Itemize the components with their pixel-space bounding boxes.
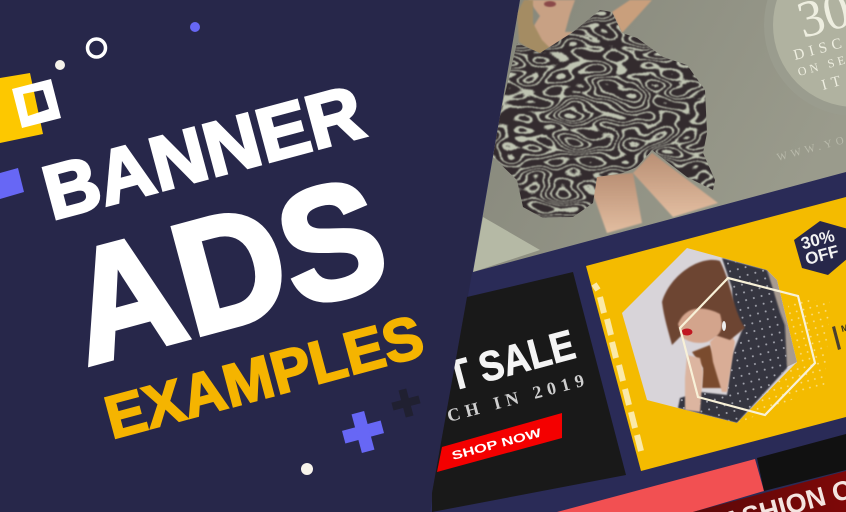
heading: banner: BANNER xyxy=(34,70,372,236)
panel: fashion photo banner xyxy=(470,0,846,275)
lips xyxy=(544,1,556,7)
icon: white ring xyxy=(88,39,106,57)
hair xyxy=(662,260,745,345)
zebra dress xyxy=(493,10,715,218)
panel: tilted banner mockups backdrop xyxy=(430,0,846,512)
badge percent: 30% xyxy=(799,226,837,253)
black block xyxy=(757,434,846,491)
right leg xyxy=(633,153,718,217)
earring xyxy=(722,321,726,331)
model xyxy=(485,0,725,233)
button label: SHOP NOW xyxy=(450,425,544,463)
badge shape xyxy=(794,221,846,275)
portrait backdrop xyxy=(622,248,797,423)
icon: purple square xyxy=(0,168,24,199)
panel: yellow discount banner xyxy=(586,197,846,471)
icon: yellow square xyxy=(0,73,43,143)
panel: black sale banner xyxy=(432,272,626,512)
discount circle xyxy=(773,0,846,106)
badge off: OFF xyxy=(803,242,841,269)
discount badge xyxy=(794,221,846,275)
raised arm xyxy=(612,0,652,33)
jacket xyxy=(678,258,787,423)
hair xyxy=(517,0,550,53)
badge text xyxy=(799,226,841,269)
icon: dark plus xyxy=(389,386,423,420)
discount text xyxy=(791,0,846,94)
photo floor xyxy=(473,217,540,272)
sale headline: T SALE xyxy=(442,321,580,400)
lips xyxy=(682,328,692,336)
halftone dots xyxy=(735,300,830,425)
icon: white square frame xyxy=(12,79,61,128)
heading: ads: ADS xyxy=(49,143,403,398)
hair strand xyxy=(692,345,723,388)
icon: purple plus xyxy=(339,408,387,456)
coral block xyxy=(557,459,764,512)
face and chest xyxy=(528,0,576,48)
hexagon outline xyxy=(680,278,815,415)
yellow background xyxy=(586,197,846,471)
date line: CH IN 2019 xyxy=(445,370,586,426)
title xyxy=(34,70,430,452)
hand xyxy=(685,355,703,412)
backdrop right side xyxy=(767,270,797,368)
jacket polka dots xyxy=(680,262,786,421)
neck and chest xyxy=(710,336,736,393)
dark red block xyxy=(693,471,846,512)
icon: white dot xyxy=(55,60,65,70)
left leg xyxy=(594,172,642,234)
heading: examples: EXAMPLES xyxy=(98,302,430,452)
circle fill xyxy=(773,0,846,107)
shop now button xyxy=(437,413,562,472)
icon: purple dot xyxy=(190,22,200,32)
sale texts xyxy=(448,330,584,421)
portrait hexagon xyxy=(622,248,797,423)
icon: lower white dot xyxy=(301,463,313,475)
button shape xyxy=(437,413,562,472)
decorative shapes xyxy=(0,22,423,475)
circle ring xyxy=(764,0,846,116)
black background xyxy=(432,272,626,512)
side stripes xyxy=(594,284,641,451)
face xyxy=(678,308,722,343)
stripe ticks xyxy=(594,284,641,451)
photo wall xyxy=(470,0,846,275)
side accent xyxy=(832,326,841,350)
panel: bottom banner peek xyxy=(557,434,846,512)
